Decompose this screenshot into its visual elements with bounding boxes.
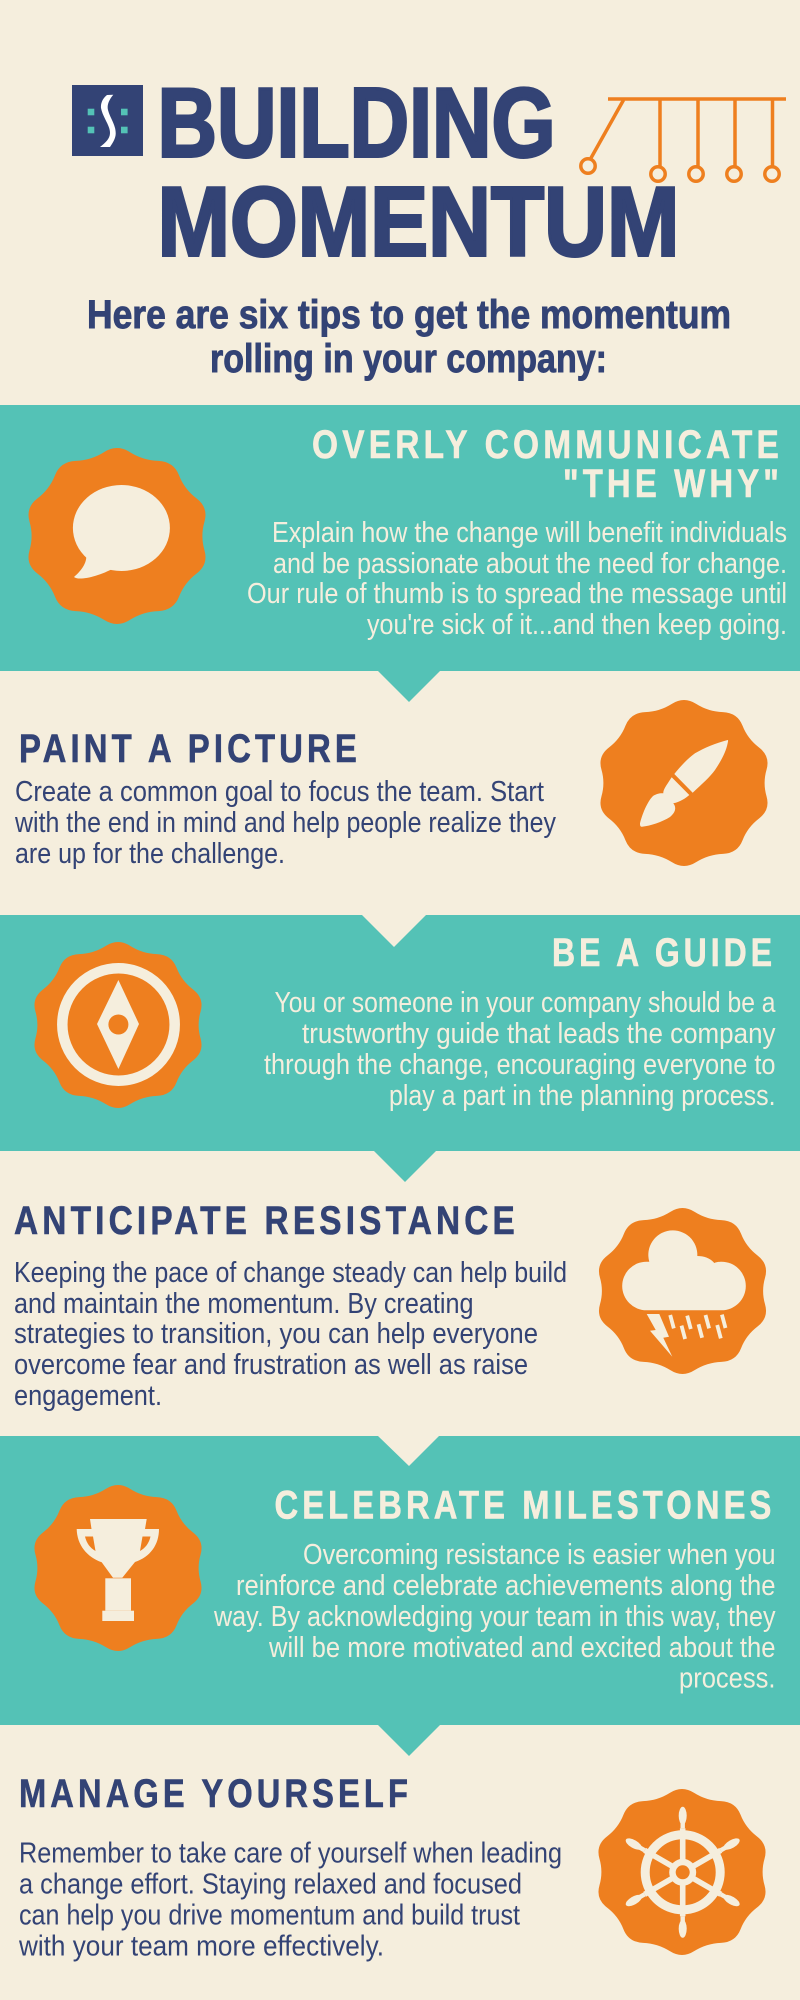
panel: overly communicate the why [0,405,800,702]
text: anticipate resistance body: and maintain the momentum. By creating [14,1288,474,1320]
heading: paint a picture: PAINT A PICTURE [19,727,361,771]
icon: ship wheel [598,1789,766,1955]
text: manage yourself body: a change effort. Staying relaxed and focused [19,1868,522,1900]
text: manage yourself body: with your team more effectively. [18,1930,384,1962]
icon: paintbrush [600,700,768,866]
subtitle: Here are six tips to get the momentum [87,293,731,337]
text: anticipate resistance body: overcome fear and frustration as well as raise [14,1349,528,1381]
text: be a guide body [264,987,776,1112]
arrow: notch into panel five [378,1436,439,1466]
text: anticipate resistance body: engagement. [14,1380,162,1412]
arrow: down from panel five [378,1725,440,1756]
text: anticipate resistance body [14,1257,567,1412]
text: paint a picture body: Create a common goal to focus the team. Start [15,776,544,808]
icon: storm cloud [599,1208,766,1374]
logo [72,85,143,156]
icon: speech bubble [28,448,206,624]
text: manage yourself body: can help you drive momentum and build trust [19,1900,520,1932]
text: overly communicate body [247,517,787,641]
text: manage yourself body: Remember to take care of yourself when leading [19,1838,562,1870]
subtitle [87,293,731,381]
heading: anticipate resistance: ANTICIPATE RESISTANCE [14,1199,519,1243]
text: celebrate milestones body [213,1539,776,1694]
title [158,68,680,276]
text: celebrate milestones body: process. [679,1662,776,1694]
text: anticipate resistance body: Keeping the pace of change steady can help build [14,1257,567,1289]
icon: newton's cradle [581,99,786,181]
text: manage yourself body [18,1838,562,1962]
arrow: down from panel one [378,671,440,702]
icon: trophy [34,1485,202,1651]
icon: compass [34,942,202,1108]
title: BUILDING [158,68,556,178]
panel: paint a picture [14,700,768,870]
arrow: notch into panel three [362,915,426,947]
title: MOMENTUM [158,166,680,276]
panel: celebrate milestones [0,1436,800,1756]
subtitle: rolling in your company: [210,337,607,381]
text: paint a picture body [14,776,556,870]
text: paint a picture body: are up for the challenge. [15,838,285,870]
panel: manage yourself [18,1772,766,1962]
arrow: down from panel three [374,1151,436,1182]
heading: manage yourself: MANAGE YOURSELF [19,1772,412,1816]
panel: be a guide [0,915,800,1182]
text: anticipate resistance body: strategies to transition, you can help everyone [14,1318,538,1350]
text: paint a picture body: with the end in mind and help people realize they [14,807,556,839]
panel: anticipate resistance [14,1199,766,1412]
heading: overly communicate [312,423,783,506]
